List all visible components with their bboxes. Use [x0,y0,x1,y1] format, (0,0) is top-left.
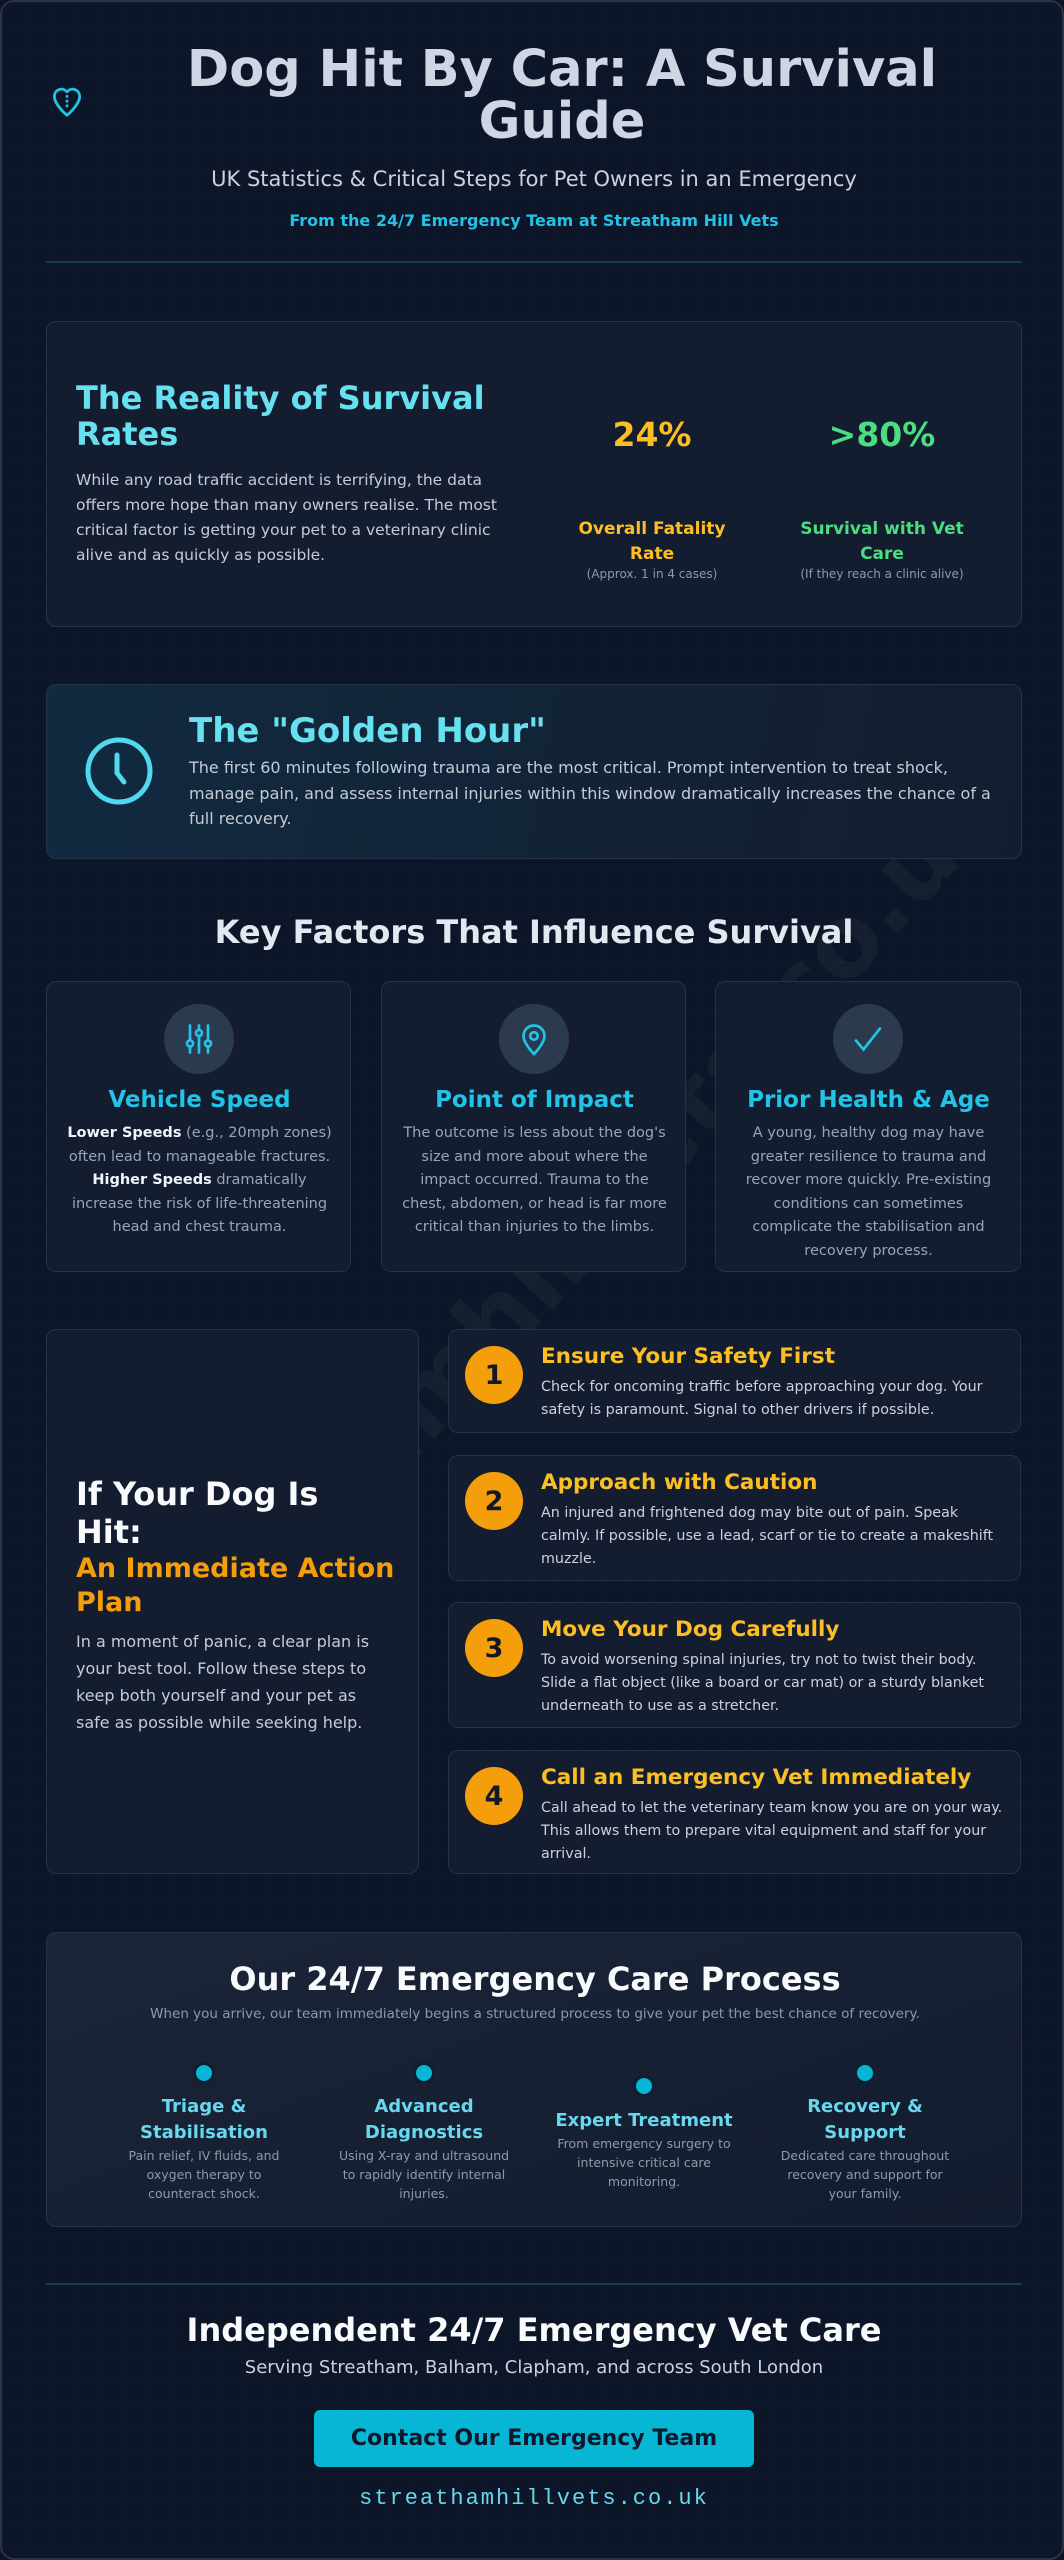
heading: golden hour: The "Golden Hour" [189,711,546,751]
step 2 [448,1455,1021,1581]
panel: point of impact [381,981,686,1272]
step 2: 2 [485,1486,503,1516]
footer text: areas: Serving Streatham, Balham, Clapham, and across South London [245,2357,823,2378]
stat: survival: (If they reach a clinic alive) [800,567,964,581]
stat: fatality: Rate [630,544,674,564]
step 4 [448,1750,1021,1874]
step 4: 4 [485,1780,503,1812]
step 2: Approach with Caution [541,1470,817,1495]
button: contact [314,2410,754,2467]
process step: triage: Pain relief, IV fluids, and oxygen therapy to counteract shock. [129,2148,279,2201]
text: care process intro: When you arrive, our team immediately begins a structured process to give your pet the best chance of recovery. [150,2006,920,2022]
step 3: To avoid worsening spinal injuries, try not to twist their body. Slide a flat object (like a board or car mat) or a sturdy blanket underneath to use as a stretcher. [541,1652,984,1714]
process step: treatment: From emergency surgery to intensive critical care monitoring. [557,2136,731,2189]
icon: check [833,1004,903,1074]
step 2: An injured and frightened dog may bite out of pain. Speak [541,1505,958,1521]
footer heading: Independent 24/7 Emergency Vet Care [187,2311,881,2349]
process step: triage [129,2062,279,2201]
byline: From the 24/7 Emergency Team at Streatham Hill Vets [289,211,779,230]
panel: prior health [715,981,1021,1272]
title: Dog Hit By Car: A Survival [187,40,937,99]
process step: diagnostics: Advanced [374,2096,474,2117]
step 4: Call an Emergency Vet Immediately [541,1765,971,1790]
panel: vehicle speed: Lower Speeds (e.g., 20mph zones) often lead to manageable fractures. Higher Speeds dramatically increase the risk of life-threatening head and chest trauma. [67,1125,332,1235]
stat: fatality: 24% [612,415,692,454]
title: Guide [479,92,645,151]
stat: fatality [578,415,726,581]
panel: action plan intro [46,1329,419,1874]
process step: recovery: Support [824,2122,906,2143]
stat: fatality: Overall Fatality [578,519,726,539]
process step: triage: Stabilisation [140,2122,268,2143]
footer url: streathamhillvets.co.uk [359,2486,709,2511]
subheading: action plan: An Immediate Action Plan [76,1553,394,1618]
step 3: Move Your Dog Carefully [541,1617,839,1642]
panel: point of impact: Point of Impact [435,1087,634,1113]
stat: survival [800,415,964,581]
text: golden hour: The first 60 minutes following trauma are the most critical. Prompt intervention to treat shock, manage pain, and assess internal injuries within this window dramatically increases the chance of a full recovery. [189,758,991,828]
heading: if your dog is hit: If Your Dog Is Hit: [76,1475,318,1551]
panel: prior health: A young, healthy dog may have greater resilience to trauma and recover more quickly. Pre-existing conditions can sometimes complicate the stabilisation and recovery process. [746,1125,991,1258]
step 3: 3 [485,1632,503,1664]
panel: point of impact: The outcome is less about the dog's size and more about where the impact occurred. Trauma to the chest, abdomen, or head is far more critical than injuries to the limbs. [402,1125,667,1235]
panel: care process [46,1932,1022,2227]
title [187,40,937,151]
panel: vehicle speed: Vehicle Speed [108,1087,291,1113]
stat: survival: Care [860,544,904,564]
step 1: Check for oncoming traffic before approaching your dog. Your safety is paramount. Signal to other drivers if possible. [541,1379,983,1418]
stat: survival: >80% [829,415,935,454]
step 2: calmly. If possible, use a lead, scarf or tie to create a makeshift muzzle. [541,1528,993,1567]
process step: recovery: Dedicated care throughout recovery and support for your family. [781,2148,949,2201]
step 1: 1 [485,1360,503,1390]
button: contact: Contact Our Emergency Team [351,2426,717,2451]
step 1 [448,1329,1021,1433]
process step: diagnostics: Using X-ray and ultrasound to rapidly identify internal injuries. [339,2148,509,2201]
stat: survival: Survival with Vet [800,519,964,539]
heading: key factors: Key Factors That Influence Survival [215,913,853,951]
process step: triage: Triage & [162,2096,246,2117]
icon: clock [86,738,152,804]
text: action intro: In a moment of panic, a clear plan is your best tool. Follow these steps to keep both yourself and your pet as safe as possible while seeking help. [76,1632,369,1732]
icon: location pin [499,1004,569,1074]
process step: diagnostics [339,2062,509,2201]
heading: reality: The Reality of Survival Rates [76,379,485,453]
panel: golden hour [46,684,1022,859]
step 1: Ensure Your Safety First [541,1344,835,1369]
panel: survival rates [46,321,1022,627]
step 4: Call ahead to let the veterinary team know you are on your way. This allows them to prepare vital equipment and staff for your arrival. [541,1800,1002,1862]
panel: vehicle speed [46,981,351,1272]
text: reality body: While any road traffic accident is terrifying, the data offers more hope than many owners realise. The most critical factor is getting your pet to a veterinary clinic alive and as quickly as possible. [76,471,497,564]
process step: diagnostics: Diagnostics [365,2122,483,2143]
icon: heart [52,88,82,117]
step 3 [448,1602,1021,1728]
panel: prior health: Prior Health & Age [747,1087,990,1113]
process step: treatment [555,2075,733,2189]
heading: care process: Our 24/7 Emergency Care Process [229,1960,841,1998]
stat: fatality: (Approx. 1 in 4 cases) [587,567,717,581]
process step: treatment: Expert Treatment [555,2110,733,2131]
icon: sliders [164,1004,234,1074]
subtitle: UK Statistics & Critical Steps for Pet Owners in an Emergency [211,167,857,191]
process step: recovery [781,2062,949,2201]
text: streathamhillvets.co.uk [36,749,1027,1815]
process step: recovery: Recovery & [807,2096,923,2117]
